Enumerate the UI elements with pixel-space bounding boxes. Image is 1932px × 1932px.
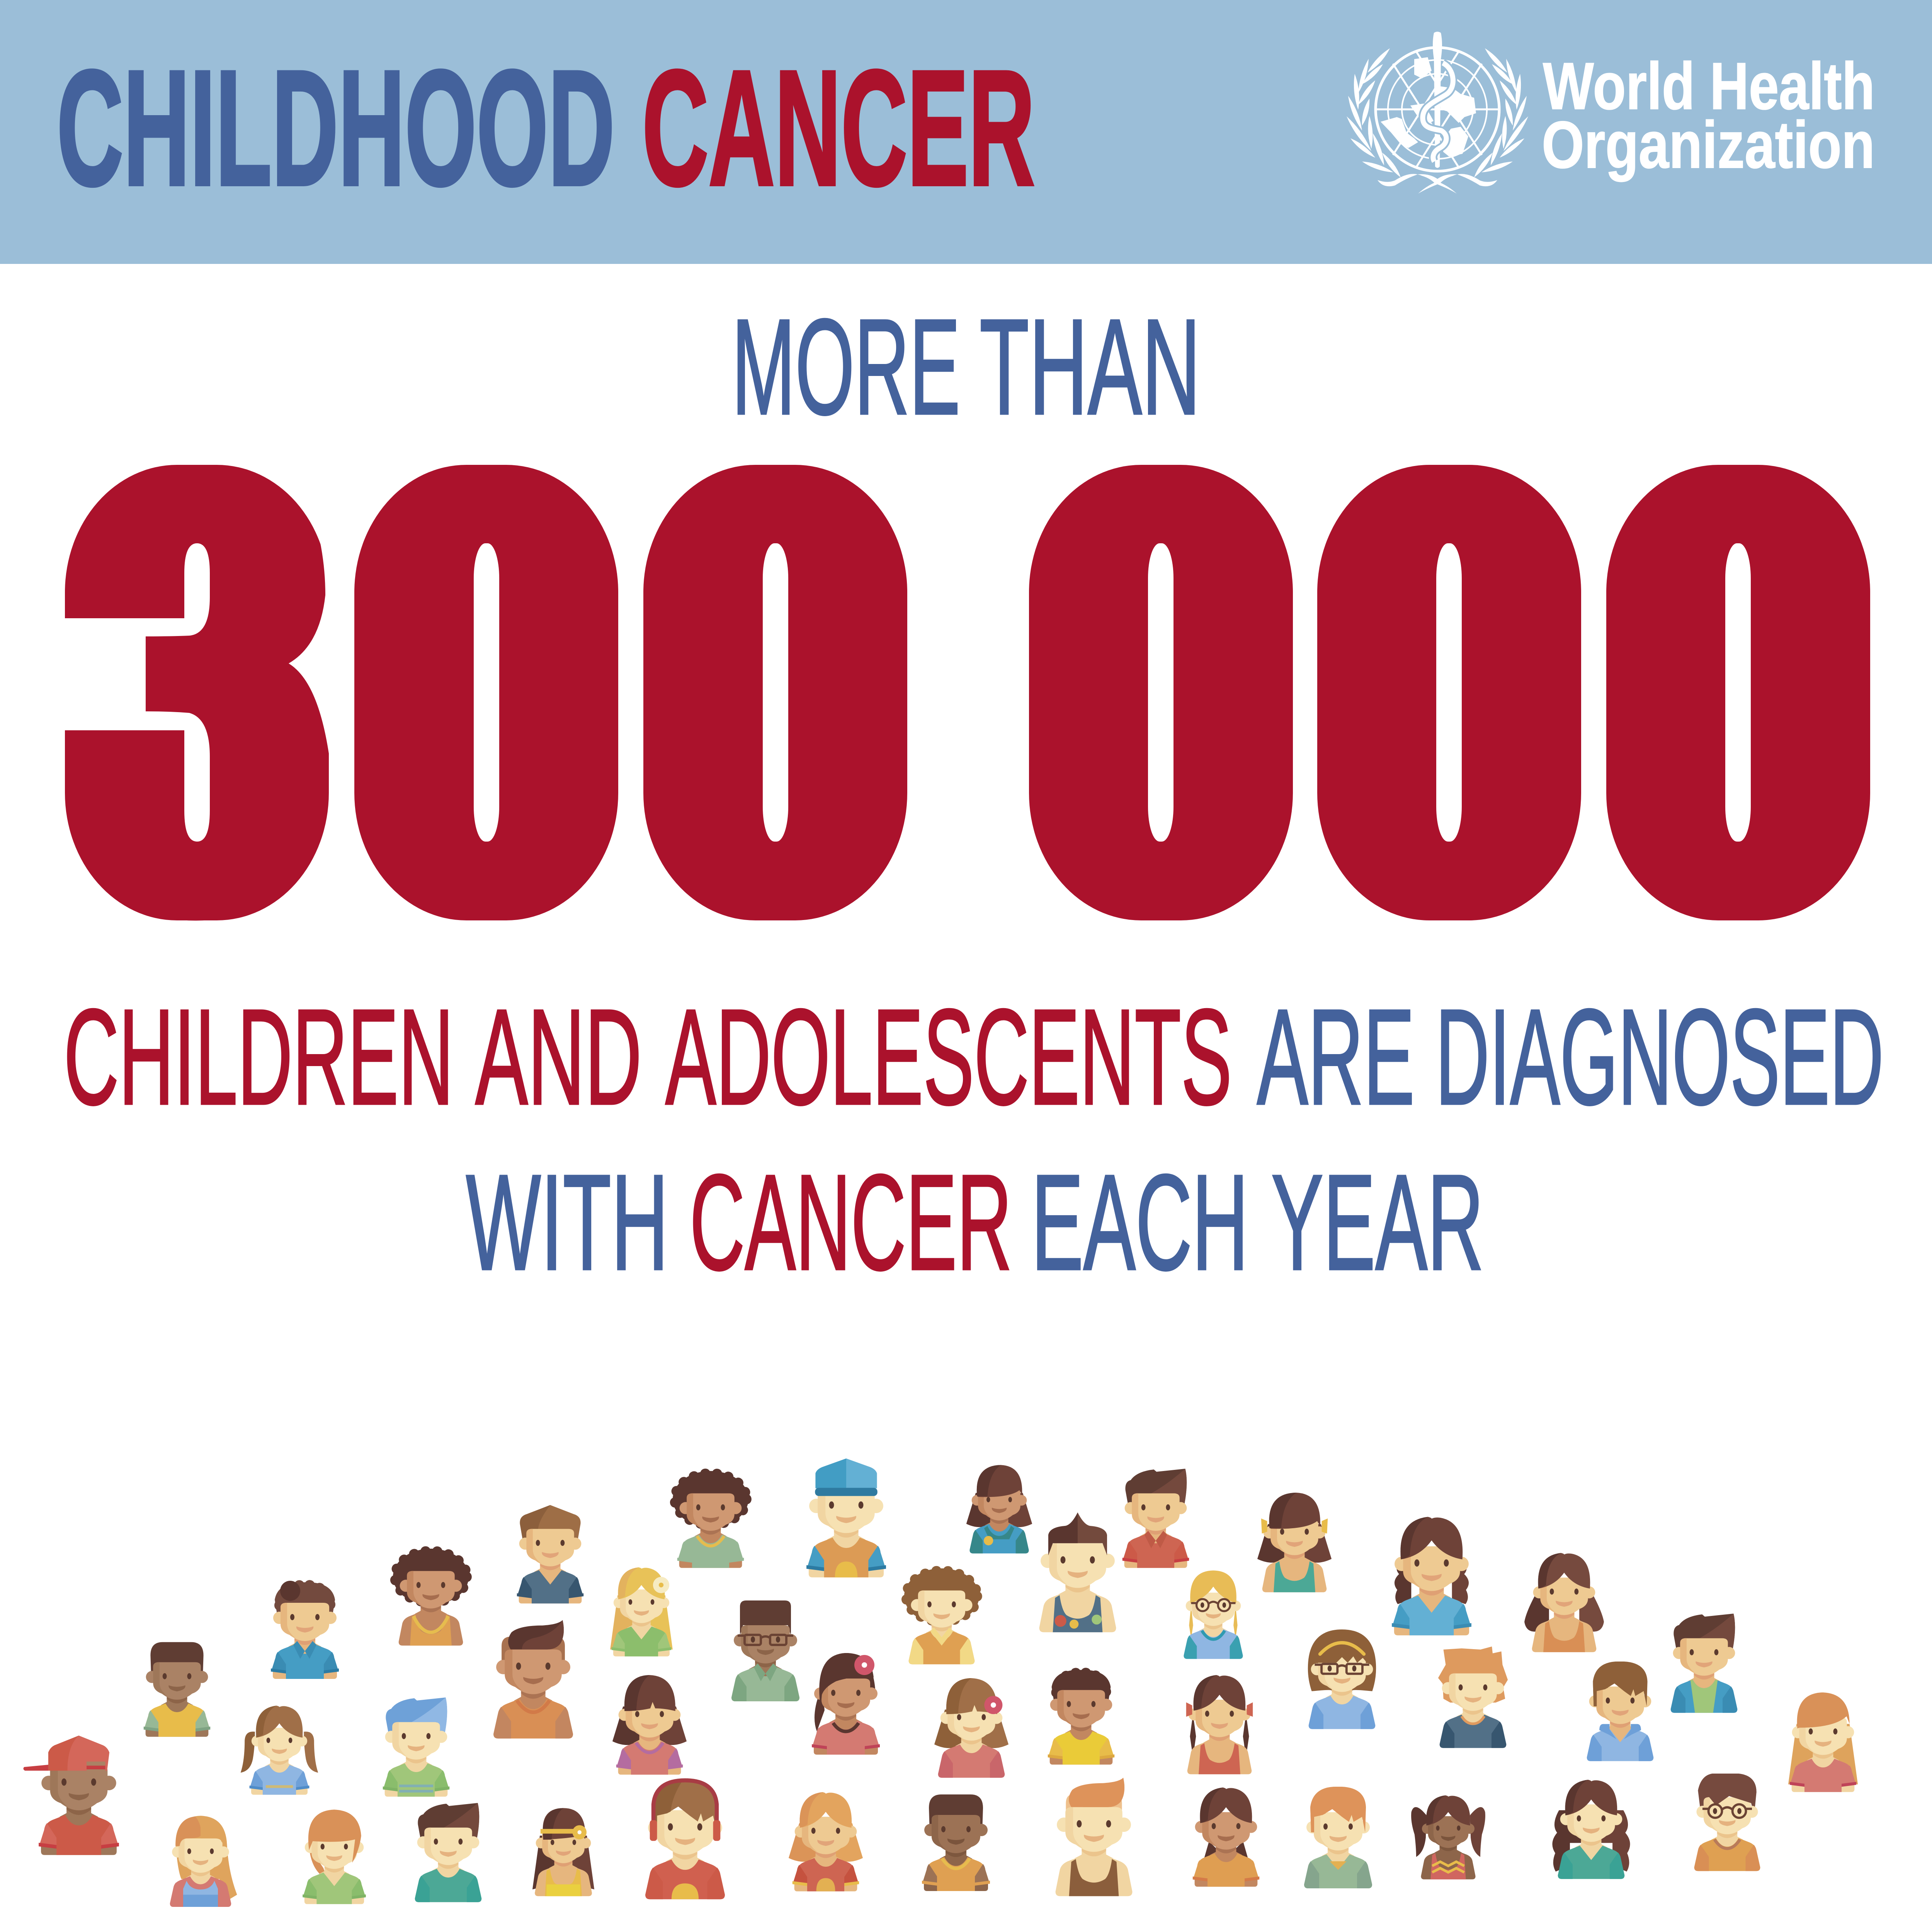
icon: girl with long dark hair in teal bbox=[1552, 1780, 1630, 1879]
icon: girl with headband and flower bbox=[532, 1808, 594, 1896]
icon: afro child in green bbox=[673, 1471, 748, 1568]
icon: girl with brown hair in orange shirt bbox=[1193, 1787, 1259, 1887]
icon: girl with dark bob bbox=[612, 1675, 687, 1775]
header band bbox=[0, 0, 1932, 264]
heading: Childhood Cancer: CHILDHOOD bbox=[57, 36, 615, 220]
icon: blonde girl with flower bbox=[610, 1567, 673, 1656]
big number: 300 000: 0 bbox=[1307, 336, 1591, 1049]
text: MORE THAN: THAN bbox=[980, 291, 1201, 443]
text: children and adolescents are diagnosed: AND bbox=[475, 981, 642, 1133]
icon: child in yellow shirt bbox=[144, 1642, 210, 1737]
icon: curly boy in blue polo bbox=[271, 1581, 339, 1679]
icon: boy in red polo bbox=[1122, 1469, 1189, 1568]
text: with cancer each year: WITH bbox=[466, 1146, 668, 1298]
icon: boy in teal shirt bbox=[415, 1803, 481, 1902]
text: with cancer each year bbox=[466, 1146, 1484, 1298]
icon: boy with blue hair bbox=[383, 1697, 449, 1797]
big number: 300 000: 0 bbox=[634, 336, 917, 1049]
icon: boy with mohawk in tank top bbox=[1039, 1512, 1116, 1632]
icon: boy with round glasses in orange shirt bbox=[1694, 1774, 1760, 1871]
WHO logo bbox=[1347, 32, 1875, 194]
illustration: crowd of children bbox=[24, 1458, 1858, 1907]
icon: girl in blue overalls bbox=[966, 1465, 1032, 1553]
big number: 300 000: 0 bbox=[344, 336, 628, 1049]
icon: wavy-haired girl in blue v-neck bbox=[1392, 1517, 1471, 1635]
icon: boy in blue cap bbox=[806, 1458, 886, 1577]
text: World Health Organization bbox=[1542, 49, 1875, 182]
icon: girl with pigtails bbox=[241, 1706, 318, 1795]
icon: boy in dark v-neck bbox=[517, 1505, 583, 1604]
icon: girl with red flower and necklace bbox=[812, 1653, 880, 1755]
icon: boy with square glasses bbox=[731, 1600, 799, 1701]
icon: child in red cap bbox=[24, 1736, 119, 1855]
icon: girl with yellow hair clip bbox=[1257, 1493, 1332, 1592]
text: children and adolescents are diagnosed bbox=[64, 981, 1884, 1133]
text: with cancer each year: YEAR bbox=[1271, 1146, 1484, 1298]
text: MORE THAN: MORE bbox=[732, 291, 960, 443]
text: with cancer each year: CANCER bbox=[690, 1146, 1012, 1298]
icon: girl with glasses and yellow headband bbox=[1308, 1629, 1376, 1729]
icon: boy in blue jacket bbox=[1671, 1614, 1737, 1713]
icon: dark-skinned boy in orange shirt bbox=[922, 1794, 990, 1891]
heading: Childhood Cancer: CANCER bbox=[642, 36, 1035, 220]
text: children and adolescents are diagnosed: CHILDREN bbox=[64, 981, 454, 1133]
icon: boy with orange quiff in tank top bbox=[1056, 1778, 1132, 1896]
icon: WHO emblem bbox=[1347, 32, 1528, 194]
big number: 300 000: 0 bbox=[1596, 336, 1880, 1049]
icon: big boy in orange shirt bbox=[493, 1620, 573, 1738]
icon: girl with orange ponytail bbox=[303, 1810, 366, 1904]
icon: curly child in orange vest bbox=[904, 1568, 979, 1664]
icon: girl with long orange hair bbox=[1788, 1692, 1858, 1792]
icon: girl with orange bob bbox=[789, 1792, 863, 1891]
icon: blonde girl with round glasses and braids bbox=[1184, 1570, 1243, 1659]
big number: 300 000 bbox=[39, 336, 1880, 1049]
icon: curly child in yellow shirt bbox=[1048, 1670, 1114, 1765]
icon: girl with braids and red top bbox=[1186, 1675, 1253, 1774]
icon: pigtailed girl in zigzag dress bbox=[1411, 1795, 1485, 1879]
icon: girl with brown hair and pink flower bbox=[934, 1678, 1009, 1778]
icon: boy with spiky orange hair bbox=[1438, 1646, 1508, 1748]
icon: orange-haired girl in overalls bbox=[170, 1816, 237, 1907]
icon: boy with headphones bbox=[645, 1780, 725, 1899]
icon: boy in blue hoodie bbox=[1587, 1662, 1653, 1761]
big number: 300 000: 3 bbox=[54, 336, 338, 1049]
text: with cancer each year: EACH bbox=[1031, 1146, 1248, 1298]
icon: afro girl bbox=[393, 1549, 469, 1646]
icon: orange-haired boy in green sweater bbox=[1304, 1787, 1372, 1888]
text: children and adolescents are diagnosed: ARE bbox=[1257, 981, 1415, 1133]
icon: curly long-haired girl in orange top bbox=[1524, 1553, 1604, 1652]
big number: 300 000: 0 bbox=[1019, 336, 1303, 1049]
text: children and adolescents are diagnosed: ADOLESCENTS bbox=[665, 981, 1232, 1133]
